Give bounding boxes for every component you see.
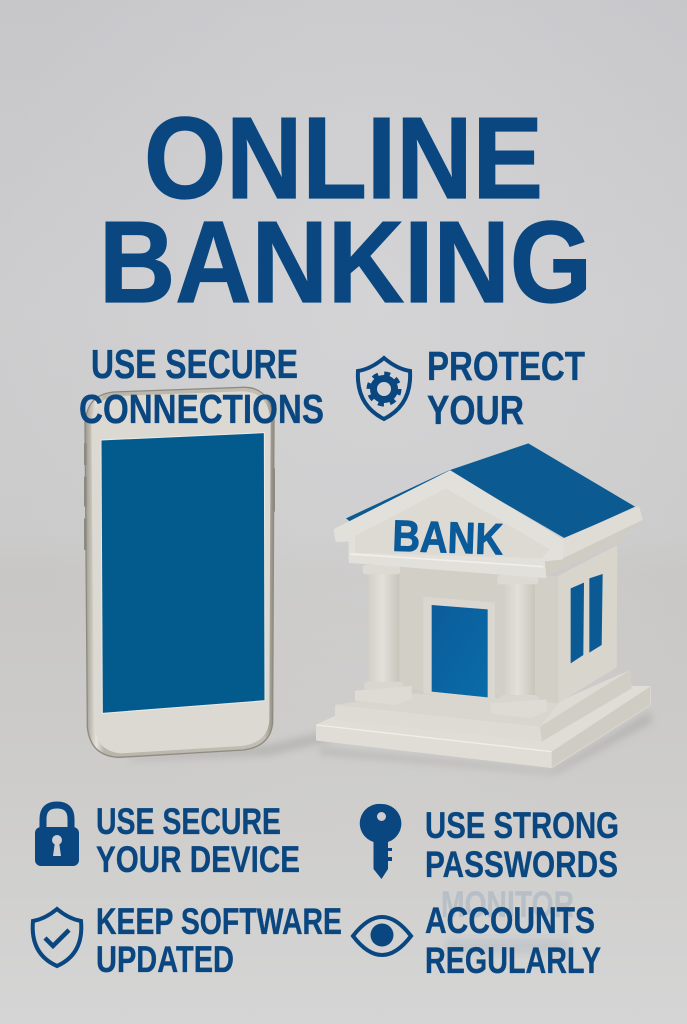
text: use secure your device: YOUR DEVICE	[96, 839, 300, 880]
ghost smudge	[445, 938, 570, 954]
right cornice	[543, 507, 642, 577]
bank label: BANK	[392, 512, 504, 564]
icon: key	[360, 804, 401, 879]
phone body	[85, 387, 274, 757]
title: BANKING	[99, 197, 592, 327]
icon: padlock	[35, 805, 79, 866]
phone face	[91, 391, 271, 753]
roof	[448, 443, 635, 538]
phone shadow	[130, 728, 340, 760]
side windows	[571, 574, 603, 663]
heading: protect your: PROTECT	[427, 343, 585, 389]
title	[99, 93, 592, 327]
front wall	[399, 567, 558, 703]
heading: use secure connections: USE SECURE	[91, 341, 298, 387]
heading: protect your	[427, 343, 585, 433]
heading: use secure connections: CONNECTIONS	[79, 386, 324, 432]
text: keep software updated: UPDATED	[96, 939, 234, 980]
title: ONLINE	[144, 93, 543, 223]
heading: use secure connections	[79, 341, 324, 432]
text: keep software updated: KEEP SOFTWARE	[96, 901, 342, 942]
smartphone	[84, 387, 275, 757]
gable panel	[355, 488, 550, 558]
phone screen	[101, 433, 265, 713]
text: keep software updated	[96, 901, 342, 980]
text: use strong passwords: USE STRONG	[425, 805, 619, 846]
text: use secure your device	[96, 801, 300, 880]
lower step	[317, 687, 650, 767]
text: use secure your device: USE SECURE	[96, 801, 281, 842]
entablature line	[350, 554, 543, 567]
text: accounts regularly: REGULARLY	[425, 940, 601, 981]
gable trim	[335, 472, 562, 577]
side wall	[557, 545, 617, 704]
text: accounts regularly	[425, 900, 601, 981]
icon: eye	[353, 917, 411, 955]
text: use strong passwords: PASSWORDS	[425, 844, 618, 885]
bank shadow	[320, 712, 652, 774]
icon: shield with gear	[358, 358, 410, 419]
door	[432, 605, 488, 697]
upper step	[335, 670, 632, 742]
right column	[491, 575, 547, 718]
icon: shield with check	[33, 909, 81, 966]
door frame	[423, 597, 495, 699]
left column	[355, 565, 412, 705]
ghost text: monitor: MONITOR	[441, 884, 574, 925]
bank building	[317, 443, 650, 767]
text: accounts regularly: ACCOUNTS	[425, 900, 595, 941]
heading: protect your: YOUR	[427, 387, 524, 433]
text: use strong passwords	[425, 805, 619, 885]
side buttons	[84, 443, 275, 550]
